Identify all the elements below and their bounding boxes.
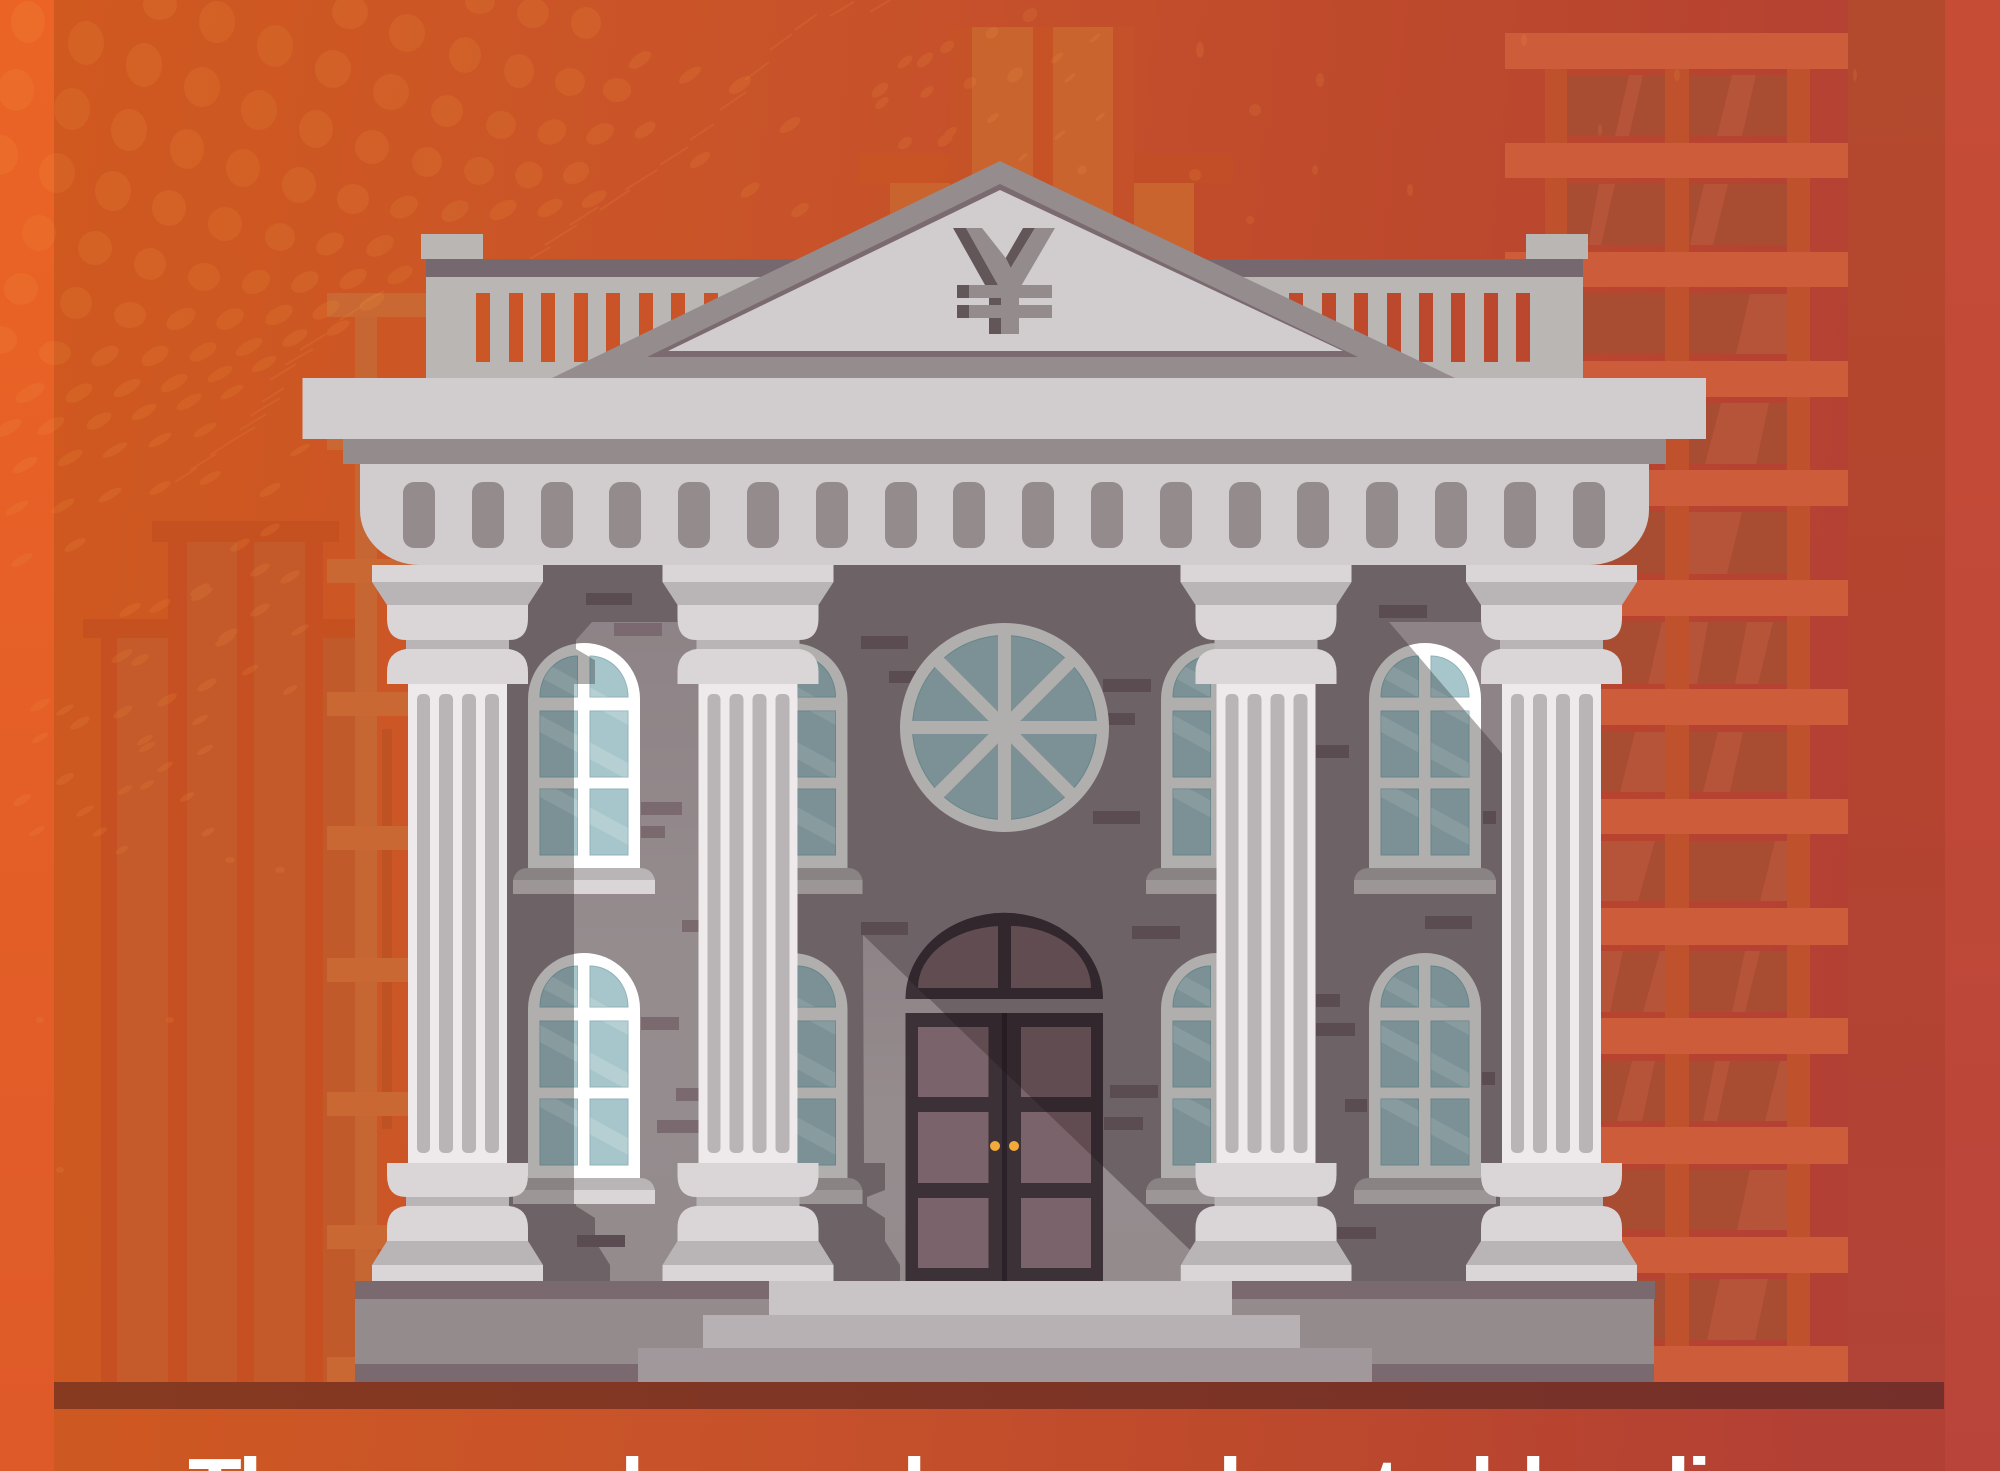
entablature band	[343, 439, 1666, 464]
modillions row	[403, 482, 1605, 548]
background building: left scaffold	[327, 293, 426, 1382]
background building: central chimneys	[860, 27, 1233, 378]
column 1	[372, 565, 543, 1281]
frieze with rounded corners	[360, 464, 1649, 565]
entrance steps	[638, 1281, 1372, 1382]
chimney block left	[421, 234, 483, 259]
podium	[355, 1281, 1655, 1382]
lit wall area right	[1389, 622, 1510, 763]
wall bricks	[577, 593, 1496, 1247]
window row 1 inner left	[720, 643, 862, 894]
lit wall area centre	[863, 935, 1190, 1281]
attic cap	[426, 259, 1583, 277]
window row 2 inner right	[1146, 953, 1288, 1204]
column 2	[662, 565, 834, 1281]
chimney block right	[1526, 234, 1588, 259]
background halftone dots	[0, 0, 1857, 1173]
background building: right tower	[1505, 0, 1945, 1382]
window row 1 inner right	[1146, 643, 1288, 894]
lit wall area left	[574, 622, 700, 1281]
door fanlight	[906, 913, 1103, 999]
attic balustrade	[426, 277, 1583, 378]
entrance door	[906, 912, 1103, 1281]
ground bar	[54, 1382, 1944, 1409]
diagonal shadow on door	[908, 912, 1103, 1166]
column 3	[1180, 565, 1352, 1281]
column 4	[1466, 565, 1637, 1281]
pediment with yen emblem	[552, 161, 1455, 378]
icon: yen symbol	[953, 228, 1055, 334]
sunlit portions of windows	[513, 643, 1496, 1204]
background building: left towers	[54, 521, 355, 1382]
round rosette window	[900, 623, 1109, 832]
door knobs	[990, 1141, 1019, 1151]
entablature slab	[302, 378, 1706, 439]
right background strip	[1945, 0, 2000, 1471]
door panels	[906, 1013, 1103, 1281]
background hatch strokes	[175, 0, 890, 482]
window row 2 left, shaded	[513, 953, 655, 1204]
left background strip	[0, 0, 54, 1471]
window row 1 left, shaded	[513, 643, 655, 894]
bank building	[302, 161, 1706, 1382]
window row 1 right	[1354, 643, 1496, 894]
window row 2 right	[1354, 953, 1496, 1204]
window row 2 inner left	[720, 953, 862, 1204]
back wall	[457, 560, 1552, 1281]
